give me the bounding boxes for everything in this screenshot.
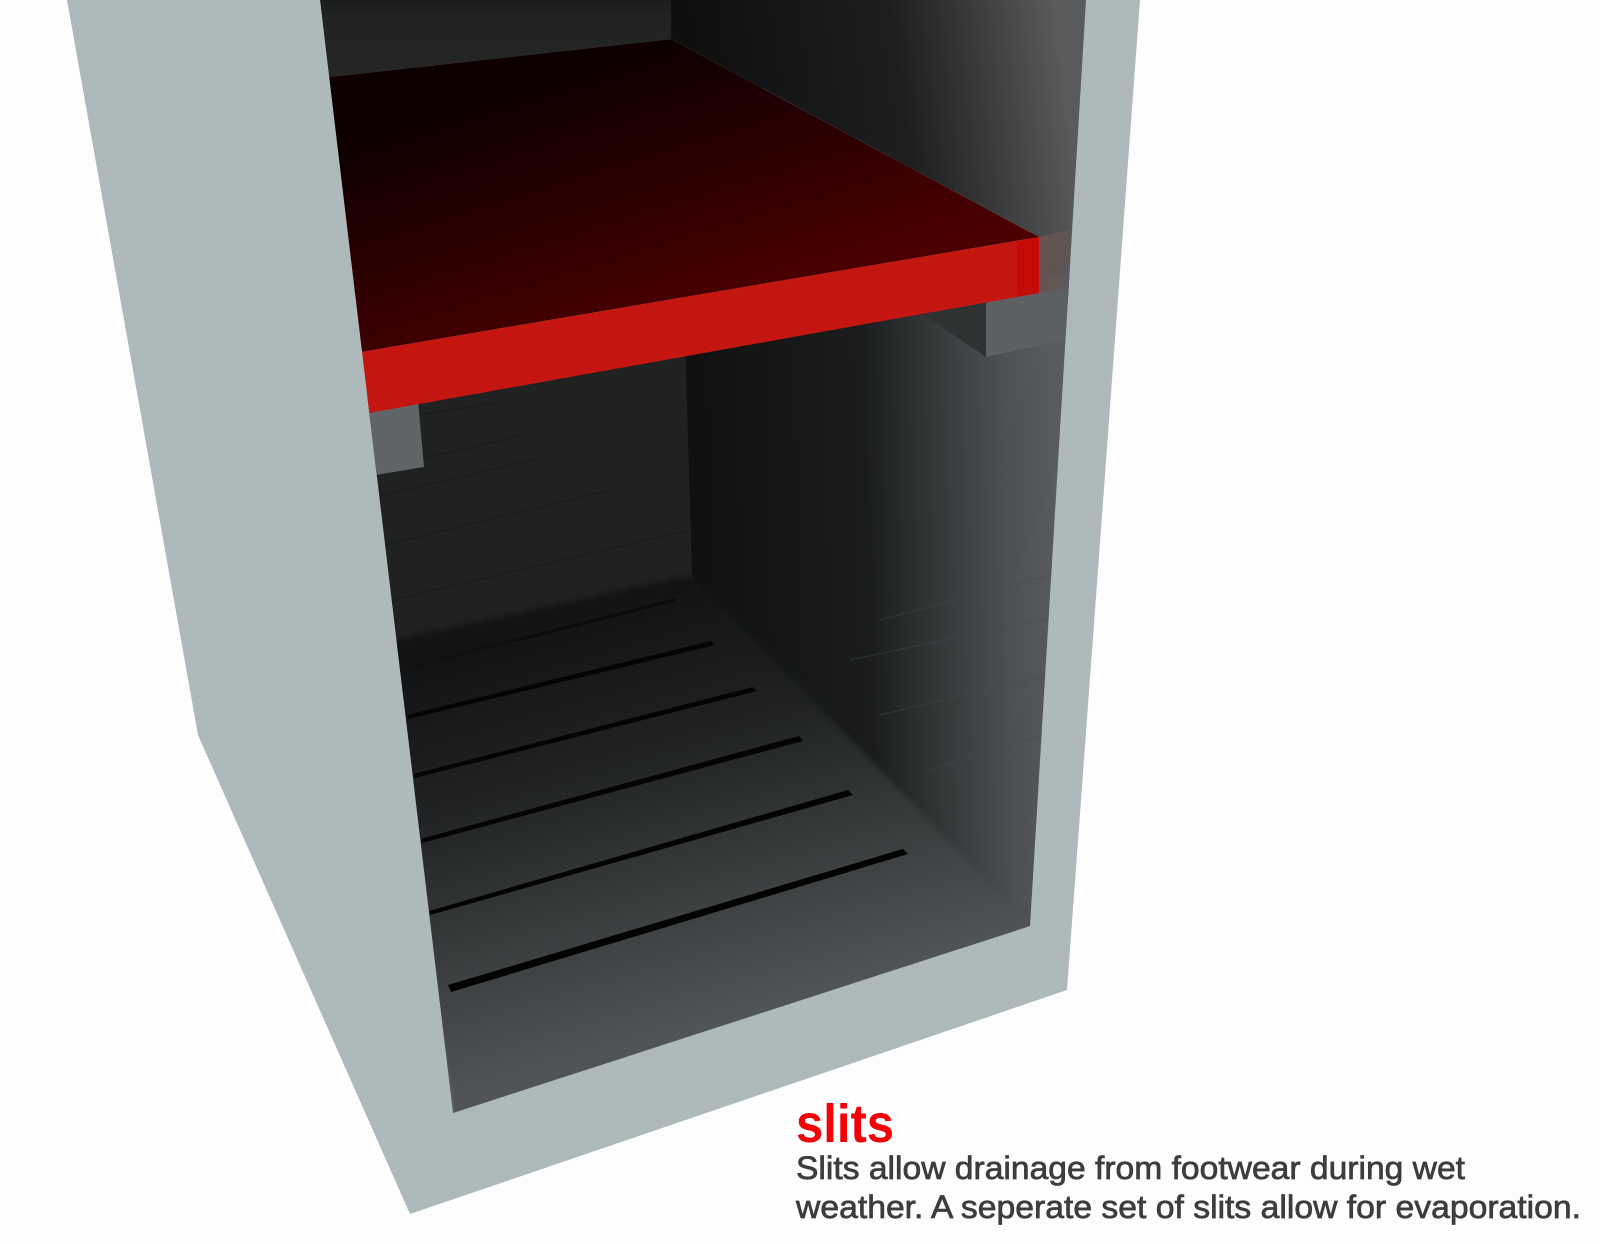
right shelf bracket xyxy=(938,286,1069,357)
caption body xyxy=(795,1150,1581,1225)
faint right wall lines xyxy=(850,608,1049,815)
upper compartment back wall xyxy=(320,0,671,77)
caption body: weather. A seperate set of slits allow for evaporation. xyxy=(795,1189,1581,1225)
red shelf xyxy=(329,39,1039,413)
lower compartment right wall xyxy=(686,276,1070,949)
drainage slits xyxy=(400,598,908,992)
shelf end section xyxy=(1017,237,1039,297)
caption xyxy=(795,1094,1581,1225)
shelf front edge xyxy=(361,237,1039,413)
floor xyxy=(380,575,1040,1130)
shelf top surface xyxy=(329,39,1039,352)
caption heading: slits xyxy=(796,1094,894,1154)
locker opening interior xyxy=(320,0,1090,1130)
caption body: Slits allow drainage from footwear during wet xyxy=(796,1150,1465,1186)
locker outer body xyxy=(67,0,1140,1214)
red haze by shelf end xyxy=(1039,228,1075,293)
left shelf bracket xyxy=(368,404,424,475)
upper compartment right wall xyxy=(671,0,1090,300)
lower compartment back wall xyxy=(360,340,700,700)
faint back wall lines xyxy=(385,544,386,546)
